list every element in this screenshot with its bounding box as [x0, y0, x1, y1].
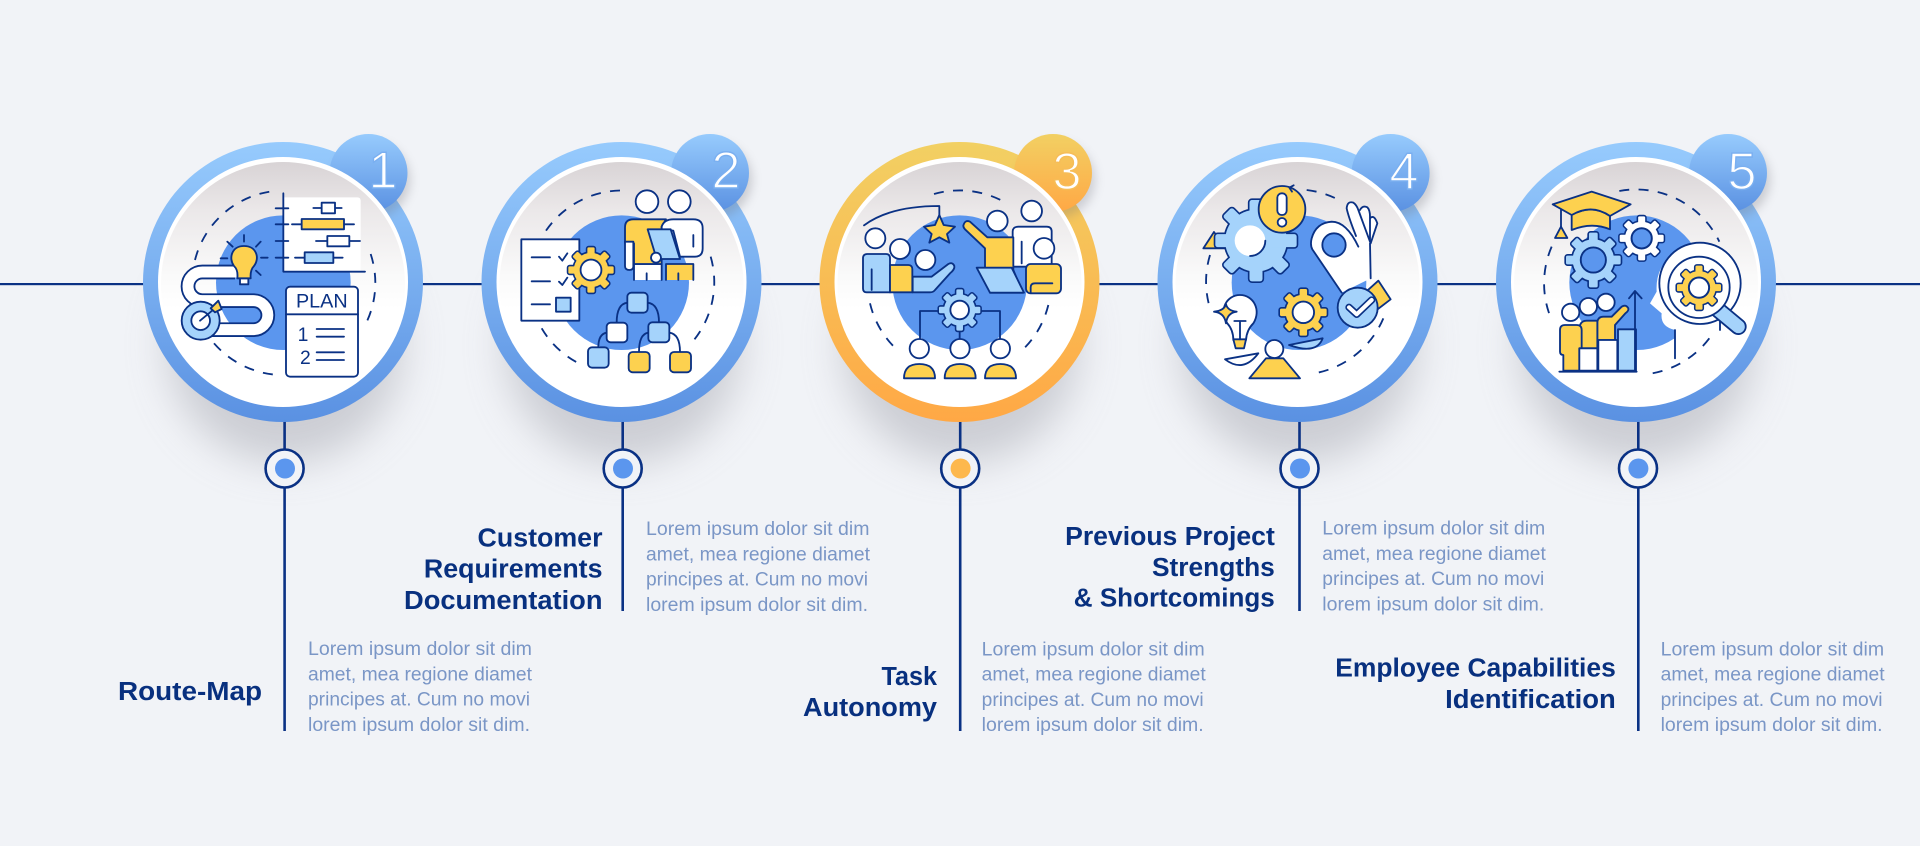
number badge 1: 1 — [369, 142, 397, 200]
text block 3 — [982, 639, 1206, 736]
heading 2 — [404, 525, 603, 615]
heading 3 — [803, 663, 938, 722]
inner disc 4 — [1172, 157, 1422, 407]
text block 4 — [1322, 518, 1547, 616]
text block 1: principes at. Cum no movi — [308, 690, 530, 711]
inner disc 5 — [1511, 157, 1761, 407]
connector dot 5 — [1619, 450, 1657, 488]
heading 2: Documentation — [404, 587, 602, 615]
text block 5: Lorem ipsum dolor sit dim — [1661, 639, 1884, 660]
text block 2: amet, mea regione diamet — [646, 544, 871, 565]
text block 5: amet, mea regione diamet — [1661, 665, 1885, 686]
text block 1: lorem ipsum dolor sit dim. — [308, 715, 530, 736]
text block 3: principes at. Cum no movi — [982, 690, 1204, 711]
number badge 3 — [1014, 134, 1092, 212]
inner disc 3 — [834, 157, 1084, 407]
text block 3: lorem ipsum dolor sit dim. — [982, 715, 1204, 736]
number badge 1 — [330, 134, 408, 212]
heading 5: Identification — [1445, 686, 1616, 714]
heading 4: & Shortcomings — [1074, 585, 1275, 613]
panel: step 4 — [1065, 134, 1547, 616]
timeline axis — [0, 283, 1920, 285]
heading 2: Requirements — [424, 556, 602, 584]
text block 5 — [1661, 639, 1885, 736]
outer ring 5 — [1496, 142, 1776, 422]
number badge 5: 5 — [1728, 143, 1756, 201]
icon: employee capabilities — [1544, 189, 1741, 374]
heading 4: Strengths — [1152, 554, 1275, 582]
text block 1: amet, mea regione diamet — [308, 664, 533, 685]
panel: step 1 — [118, 134, 533, 736]
icon: route map and plan — [182, 191, 375, 377]
number badge 2 — [671, 134, 749, 212]
inner disc 2 — [496, 157, 746, 407]
icon: strengths and shortcomings — [1203, 185, 1391, 378]
text block 4: amet, mea regione diamet — [1322, 544, 1547, 565]
outer ring 1 — [143, 142, 423, 422]
text block 4: principes at. Cum no movi — [1322, 569, 1544, 590]
icon: requirements team — [521, 190, 714, 372]
text block 5: lorem ipsum dolor sit dim. — [1661, 715, 1883, 736]
heading 3: Autonomy — [803, 694, 938, 722]
panel: step 3 — [803, 134, 1206, 736]
icon: route map and plan: PLAN — [296, 291, 348, 312]
connector dot 2 — [604, 450, 642, 488]
inner disc 1 — [158, 157, 408, 407]
text block 4: Lorem ipsum dolor sit dim — [1322, 518, 1545, 539]
heading 2: Customer — [478, 525, 603, 553]
text block 5: principes at. Cum no movi — [1661, 690, 1883, 711]
text block 4: lorem ipsum dolor sit dim. — [1322, 595, 1544, 616]
heading 1: Route-Map — [118, 678, 262, 706]
connector dot 1 — [266, 450, 304, 488]
outer ring 3 — [820, 142, 1100, 422]
heading 5 — [1335, 655, 1616, 714]
text block 3: amet, mea regione diamet — [982, 665, 1206, 686]
heading 4: Previous Project — [1065, 523, 1275, 551]
heading 4 — [1065, 523, 1275, 613]
panel: step 5 — [1335, 134, 1885, 736]
icon: route map and plan: 1 — [298, 325, 308, 346]
soft shadows — [167, 227, 1755, 463]
connector dot 4 — [1280, 450, 1318, 488]
heading 3: Task — [882, 663, 938, 691]
text block 2: lorem ipsum dolor sit dim. — [646, 595, 868, 616]
text block 3: Lorem ipsum dolor sit dim — [982, 639, 1205, 660]
number badge 4 — [1352, 134, 1430, 212]
text block 2: Lorem ipsum dolor sit dim — [646, 519, 870, 540]
icon: task autonomy team — [863, 190, 1061, 378]
number badge 3: 3 — [1053, 143, 1081, 201]
text block 1: Lorem ipsum dolor sit dim — [308, 639, 532, 660]
number badge 2: 2 — [712, 142, 740, 200]
connector dot 3 — [941, 450, 979, 488]
icon: route map and plan: 2 — [300, 348, 311, 369]
panel: step 2 — [404, 134, 871, 616]
text block 1 — [308, 639, 533, 736]
outer ring 2 — [482, 142, 762, 422]
text block 2 — [646, 519, 871, 616]
number badge 4: 4 — [1390, 143, 1418, 201]
number badge 5 — [1689, 134, 1767, 212]
text block 2: principes at. Cum no movi — [646, 570, 868, 591]
heading 5: Employee Capabilities — [1335, 655, 1616, 683]
outer ring 4 — [1158, 142, 1438, 422]
